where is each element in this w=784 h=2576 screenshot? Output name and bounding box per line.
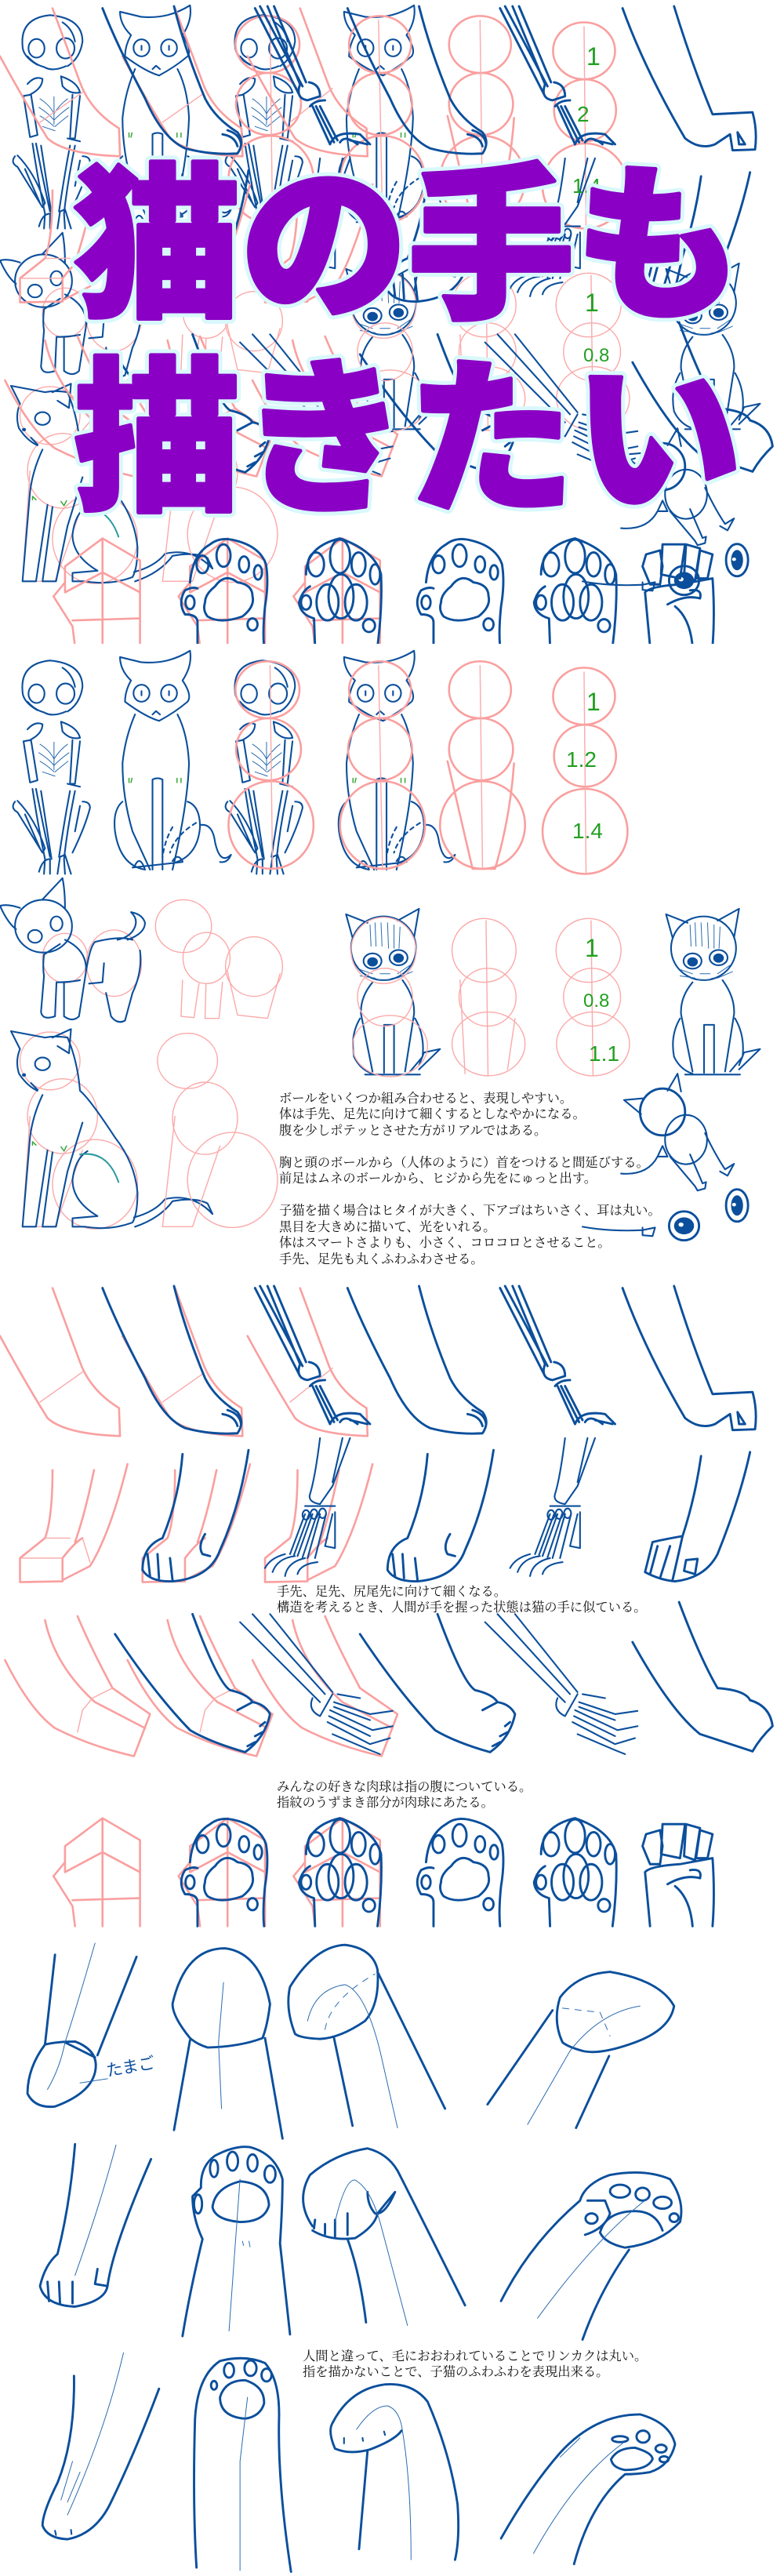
proportions labels: 1.4	[572, 819, 603, 843]
kitten proportions labels: 1.1	[589, 1041, 619, 1066]
panel: seated adult cat side view	[11, 1029, 278, 1229]
collage background behind the title: 2	[577, 102, 590, 126]
panel: fluffy kitten paw in four views	[42, 2353, 675, 2572]
kitten proportions labels	[583, 934, 619, 1066]
text block: ball construction notes: 手先、足先も丸くふわふわさせる。	[279, 1252, 484, 1266]
text block: ball construction notes: 胸と頭のボールから（人体のように）首をつけると間延びする。	[279, 1155, 649, 1170]
proportions labels: 1	[586, 688, 601, 716]
collage background behind the title: 0.8	[583, 345, 609, 366]
title: 猫の手も描きたい: 描きたい	[74, 347, 742, 534]
diagram: ball cat, eyes and arrows	[583, 1074, 748, 1241]
panel: front-view cat construction with skeleton and ball proportions	[13, 651, 627, 874]
proportions labels	[566, 688, 603, 843]
collage background behind the title: 1	[586, 42, 601, 71]
text block: paw tapering notes: 構造を考えるとき、人間が手を握った状態は猫の手に似ている。	[277, 1600, 647, 1615]
panel: foreleg front views row 2	[20, 1438, 750, 1582]
text block: ball construction notes: 体は手先、足先に向けて細くするとしなやかになる。	[279, 1106, 586, 1121]
text block: paw pad notes: みんなの好きな肉球は指の腹についている。	[277, 1779, 532, 1794]
text block: paw pad notes: 指紋のうずまき部分が肉球にあたる。	[277, 1795, 494, 1810]
panel: paw with toes in four views	[40, 2144, 681, 2339]
panel: standing kitten side view	[0, 878, 282, 1022]
collage background behind the title	[0, 5, 772, 646]
title: 猫の手も描きたい: 猫の手も	[74, 154, 742, 340]
text block: ball construction notes: 子猫を描く場合はヒタイが大きく、下アゴはちいさく、耳は丸い。	[279, 1203, 661, 1218]
text block: fur rounds the silhouette: 人間と違って、毛におおわれていることでリンカクは丸い。	[303, 2349, 647, 2363]
text block: ball construction notes: 腹を少しポテッとさせた方がリアルではある。	[279, 1123, 546, 1138]
title: 猫の手も描きたい: 猫の手も	[74, 154, 742, 340]
proportions labels: 1.2	[566, 747, 597, 772]
kitten proportions labels: 1	[585, 934, 599, 962]
collage background behind the title: 1.4	[572, 174, 601, 198]
collage background behind the title: 1	[585, 289, 599, 317]
panel: egg shaped paw construction	[27, 1943, 674, 2138]
panel: kitten front view with balls	[346, 909, 760, 1077]
handwritten label: たまご: たまご	[105, 2054, 156, 2080]
text block: ball construction notes: 体はスマートさよりも、小さく、コロコロとさせること。	[279, 1235, 611, 1250]
panel: paw pads and fist comparison	[53, 1818, 713, 1926]
panel: foreleg side views row 1	[0, 1286, 756, 1436]
text block: fur rounds the silhouette: 指を描かないことで、子猫のふわふわを表現出来る。	[303, 2364, 608, 2379]
title: 猫の手も描きたい	[74, 154, 742, 534]
kitten proportions labels: 0.8	[583, 990, 609, 1012]
text block: paw tapering notes: 手先、足先、尻尾先に向けて細くなる。	[277, 1584, 506, 1599]
text block: ball construction notes: 前足はムネのボールから、ヒジから先をにゅっと出す。	[279, 1171, 597, 1186]
panel: foreleg angled views row 3	[5, 1602, 772, 1756]
text block: ball construction notes: 黒目を大きめに描いて、光をいれる。	[279, 1219, 495, 1234]
title: 猫の手も描きたい: 描きたい	[74, 347, 742, 534]
text block: ball construction notes: ボールをいくつか組み合わせると、表現しやすい。	[279, 1091, 572, 1106]
